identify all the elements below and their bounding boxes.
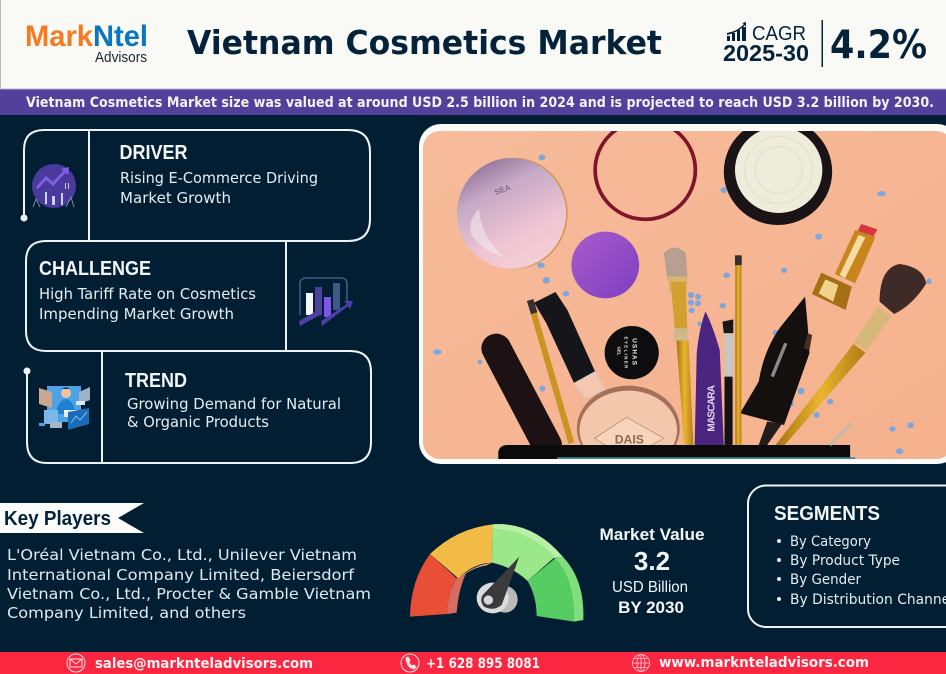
key players list: L'Oréal Vietnam Co., Ltd., Unilever Vietnam	[7, 546, 357, 564]
challenge: CHALLENGE	[39, 258, 151, 280]
key players list	[7, 546, 371, 622]
key players banner	[0, 503, 144, 533]
driver	[32, 142, 318, 208]
icon: email	[67, 654, 85, 672]
red segment	[410, 554, 457, 617]
yellow segment	[430, 524, 493, 578]
icon: rising e-commerce	[32, 164, 76, 208]
jar: eyeliner gel: EYELINER	[623, 337, 628, 369]
trend: Growing Demand for Natural	[127, 395, 341, 413]
sponge	[571, 232, 639, 298]
key players list: Company Limited, and others	[7, 604, 246, 622]
gauge	[410, 524, 583, 622]
icon: phone	[401, 654, 419, 672]
logo: MarkNtel Advisors	[25, 20, 148, 66]
challenge: High Tariff Rate on Cosmetics	[39, 285, 256, 303]
key players banner: Key Players	[4, 508, 111, 530]
jar: eyeliner gel	[605, 326, 659, 379]
footer contact bar: www.marknteladvisors.com	[659, 655, 869, 671]
trend: & Organic Products	[127, 413, 269, 431]
compact: powder	[576, 386, 680, 445]
thin gold brush	[530, 300, 571, 443]
segment list: By Category	[790, 534, 871, 550]
icon: bar chart with arrow	[299, 278, 353, 326]
photo: cosmetics flat lay	[423, 118, 946, 471]
green segment	[528, 558, 574, 622]
header band	[0, 0, 946, 89]
mascara	[695, 312, 724, 445]
footer contact bar: +1 628 895 8081	[426, 656, 540, 672]
challenge: Impending Market Growth	[39, 305, 234, 323]
compact: powder: DAIS	[615, 432, 644, 446]
icon: globe	[632, 654, 650, 672]
compact: pink cushion: SEA	[493, 183, 512, 197]
key players list: International Company Limited, Beiersdorf	[7, 566, 355, 584]
mascara: MASCARA	[707, 385, 718, 432]
segment list	[777, 534, 946, 608]
driver: Rising E-Commerce Driving	[120, 169, 318, 187]
market value	[600, 525, 704, 617]
jar: eyeliner gel: USHAS	[630, 338, 637, 365]
driver: DRIVER	[120, 142, 188, 164]
photo frame	[419, 124, 946, 464]
makeup pouch	[498, 423, 855, 463]
CAGR block: 2025-30	[723, 40, 809, 66]
footer contact bar	[0, 652, 946, 674]
logo: MarkNtel Advisors: Advisors	[95, 50, 147, 66]
panel: driver, challenge, trend	[20, 130, 371, 463]
CAGR block: CAGR	[752, 23, 806, 45]
panel: segments	[748, 486, 946, 627]
compact: pink cushion	[457, 158, 568, 269]
market value: Market Value	[600, 525, 704, 544]
jar: eyeliner gel: GEL	[616, 347, 622, 356]
lipstick	[812, 224, 878, 310]
footer contact bar: sales@marknteladvisors.com	[95, 656, 313, 672]
beads	[433, 154, 932, 454]
compact: highlighter	[724, 131, 832, 225]
ring: burgundy mirror	[595, 121, 695, 219]
logo: MarkNtel Advisors: Mark	[25, 20, 93, 53]
key players list: Vietnam Co., Ltd., Procter & Gamble Vietnam	[7, 585, 371, 603]
thin long brush	[735, 255, 742, 445]
driver: Market Growth	[120, 189, 231, 207]
trend: TREND	[125, 370, 187, 392]
segment list: By Gender	[790, 572, 861, 588]
logo: MarkNtel Advisors: Ntel	[93, 20, 148, 53]
market value: BY 2030	[618, 598, 684, 617]
light green segment	[492, 524, 563, 581]
CAGR block	[723, 20, 927, 68]
market value: 3.2	[634, 546, 670, 576]
market value: USD Billion	[612, 579, 688, 596]
title: Vietnam Cosmetics Market	[187, 23, 662, 62]
blush brush	[776, 264, 926, 445]
icon: growth bars	[727, 22, 746, 41]
needle and hub	[477, 557, 519, 613]
left applicator	[496, 348, 547, 445]
trend	[39, 370, 341, 431]
segment list: By Product Type	[790, 553, 900, 569]
CAGR block: 4.2%	[830, 23, 927, 68]
foundation brush	[664, 247, 693, 445]
panel outlines	[20, 130, 371, 463]
kohl liner	[740, 297, 812, 445]
angled brush	[722, 319, 733, 445]
summary banner	[0, 88, 946, 115]
black lip stick	[534, 292, 605, 398]
icon: analyst with dashboards	[39, 386, 90, 430]
panel: segments: SEGMENTS	[774, 503, 880, 525]
challenge	[39, 258, 353, 326]
